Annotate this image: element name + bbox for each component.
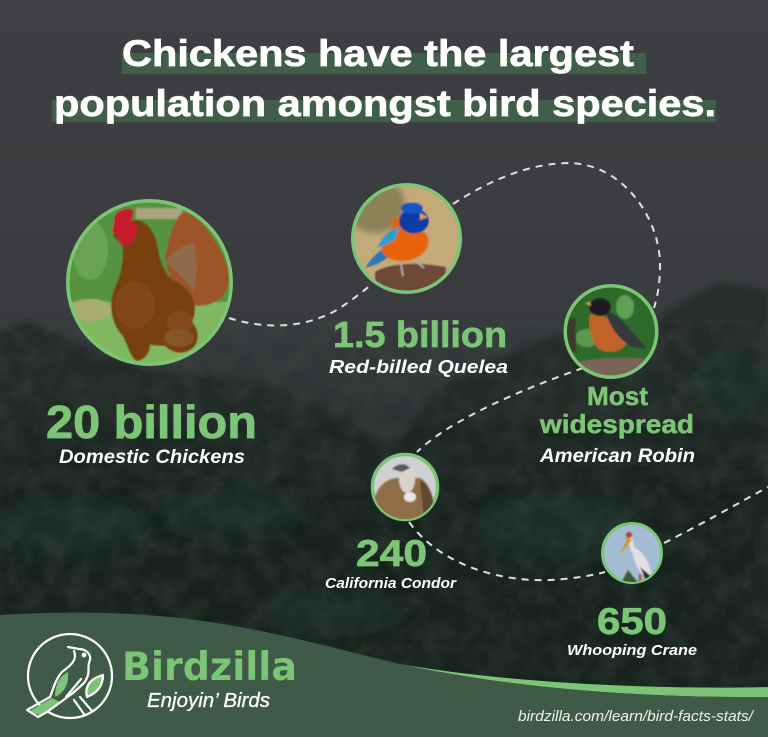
stat: 20 billion domestic chickens — [46, 396, 257, 468]
stat: most widespread american robin: American Robin — [539, 446, 695, 467]
stat: 650 whooping crane — [567, 601, 697, 659]
stat: 1.5 billion red-billed quelea — [329, 314, 508, 377]
source url: birdzilla.com/learn/bird-facts-stats/ — [518, 709, 755, 725]
dashed connector lines — [229, 163, 768, 580]
stat: most widespread american robin: widespread — [539, 409, 694, 439]
logo wordmark: Enjoyin’ Birds — [147, 690, 270, 712]
photo: american robin — [564, 285, 658, 380]
stat: 1.5 billion red-billed quelea: Red-billed Quelea — [329, 357, 508, 377]
photo: whooping crane — [602, 524, 662, 585]
logo wordmark — [122, 645, 297, 712]
stat: most widespread american robin — [539, 381, 695, 467]
stat: 1.5 billion red-billed quelea: 1.5 billion — [333, 314, 507, 355]
title: Chickens have the largest — [122, 33, 634, 74]
title: population amongst bird species. — [54, 83, 716, 124]
stat: 240 california condor — [325, 533, 457, 592]
stat: 20 billion domestic chickens: Domestic Chickens — [59, 447, 245, 468]
stat: most widespread american robin: Most — [587, 381, 648, 411]
footer band — [0, 613, 768, 737]
photo: red-billed quelea — [351, 183, 462, 294]
photo: domestic chicken — [66, 199, 236, 372]
stat: 20 billion domestic chickens: 20 billion — [46, 396, 257, 448]
stat: 650 whooping crane: 650 — [597, 601, 667, 642]
title — [52, 33, 716, 124]
stat: 240 california condor: 240 — [356, 533, 427, 574]
stat: 650 whooping crane: Whooping Crane — [567, 642, 697, 659]
photo: california condor — [372, 454, 438, 525]
logo wordmark: Birdzilla — [122, 645, 297, 690]
logo: birdzilla bird emblem — [27, 634, 112, 718]
stat: 240 california condor: California Condor — [325, 576, 457, 592]
